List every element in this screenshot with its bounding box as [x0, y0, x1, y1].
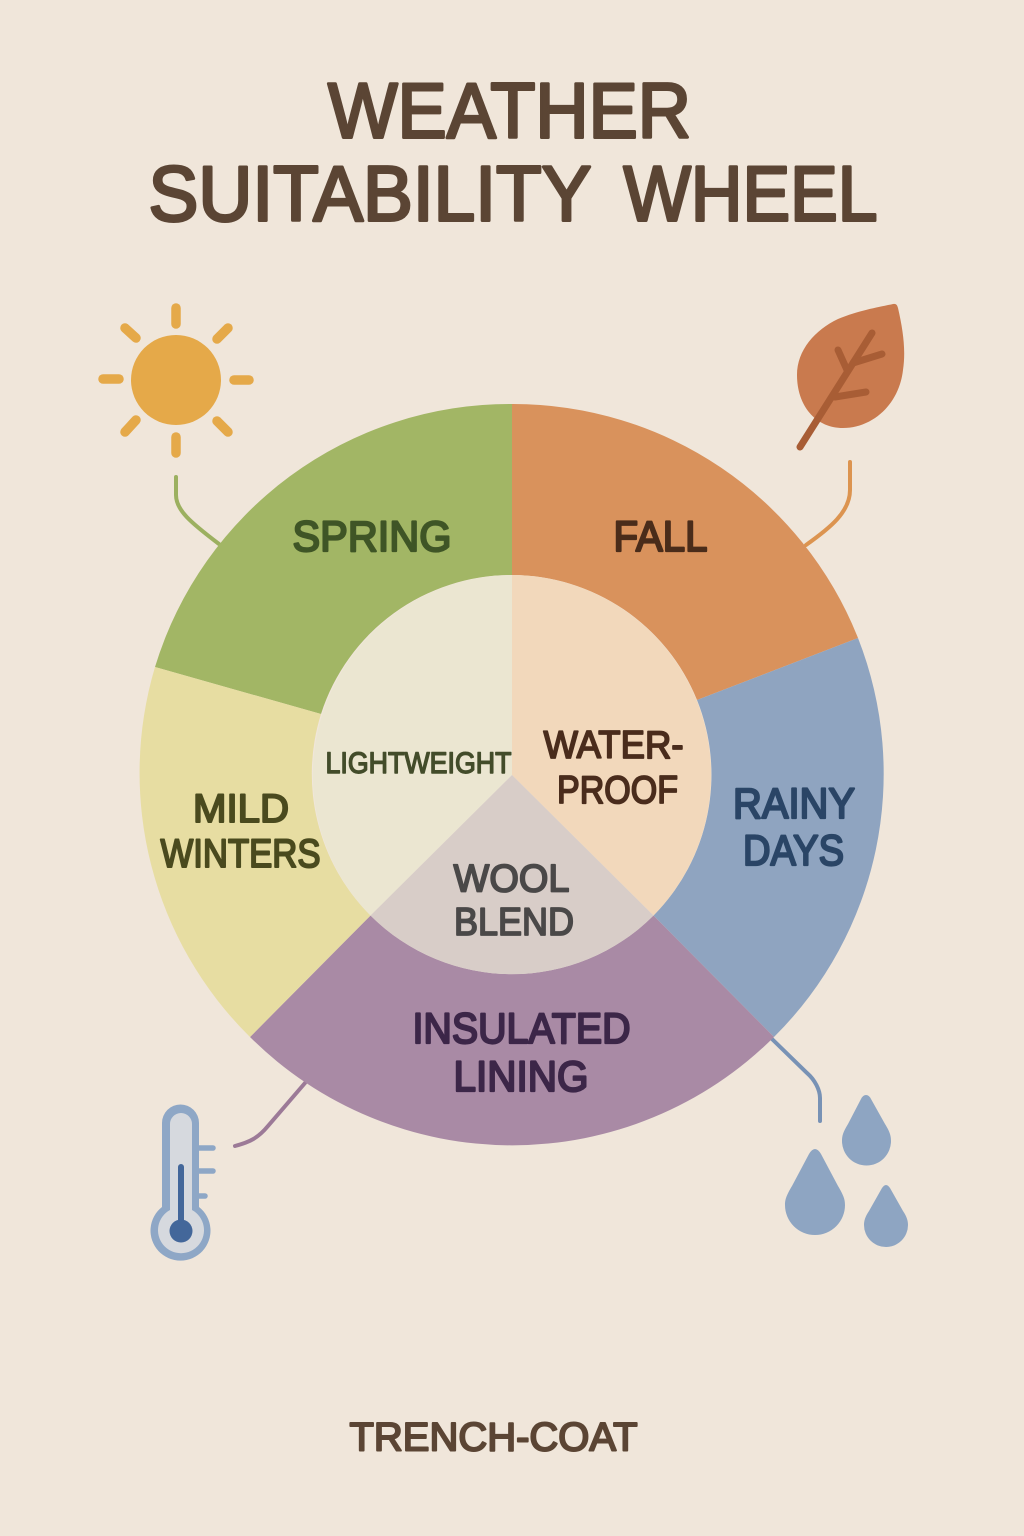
label: waterproof: PROOF	[557, 769, 678, 812]
label: wool blend	[454, 858, 574, 944]
inner: waterproof	[512, 575, 711, 916]
label: rainy days	[733, 780, 855, 875]
title: WEATHER	[328, 66, 691, 154]
inner: lightweight	[313, 575, 512, 916]
footer label: TRENCH-COAT	[350, 1416, 638, 1460]
label: waterproof	[544, 724, 684, 812]
label: insulated lining: INSULATED	[412, 1005, 630, 1053]
label: spring: SPRING	[292, 513, 452, 561]
label: fall: FALL	[614, 513, 708, 561]
title: WHEEL	[624, 150, 878, 238]
connector: fall to leaf	[806, 462, 850, 545]
title: SUITABILITY	[148, 150, 592, 238]
title	[148, 66, 878, 238]
label: rainy days: RAINY	[733, 780, 855, 828]
segment: mild winters	[140, 667, 370, 1037]
label: mild winters	[160, 787, 320, 876]
segment: fall	[512, 404, 858, 700]
connector: insulated lining to thermometer	[235, 1083, 305, 1146]
icon: rain drops	[785, 1095, 908, 1247]
connector: spring to sun	[176, 477, 219, 544]
segment: rainy days	[654, 638, 884, 1037]
label: insulated lining: LINING	[454, 1053, 588, 1101]
wheel	[140, 404, 884, 1145]
icon: thermometer	[151, 1104, 213, 1261]
label: wool blend: WOOL	[454, 858, 570, 900]
segment: insulated lining	[250, 916, 774, 1145]
label: mild winters: WINTERS	[160, 832, 320, 876]
inner: wool blend	[370, 775, 654, 974]
label: wool blend: BLEND	[454, 901, 574, 944]
label: insulated lining	[412, 1005, 630, 1101]
connector: rainy days to drops	[772, 1039, 820, 1121]
segment: spring	[155, 404, 512, 714]
icon: sun	[103, 308, 249, 453]
label: mild winters: MILD	[193, 787, 289, 831]
icon: leaf	[797, 304, 904, 447]
label: lightweight: LIGHTWEIGHT	[326, 747, 512, 780]
label: waterproof: WATER-	[544, 724, 684, 767]
label: rainy days: DAYS	[743, 827, 844, 875]
